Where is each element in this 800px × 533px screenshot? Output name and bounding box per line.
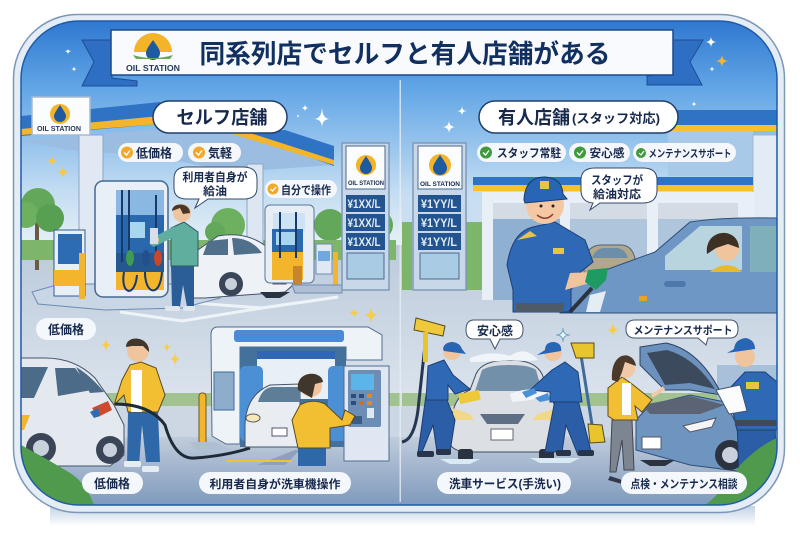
drop shadow <box>50 506 755 526</box>
sky <box>21 21 777 246</box>
price sign staffed: ¥1YY/L <box>421 237 457 249</box>
label: low price lower <box>82 472 143 494</box>
trees behind sign <box>402 222 482 290</box>
price sign staffed: OIL STATION <box>420 181 460 188</box>
panel: bottom right services <box>402 318 777 505</box>
wall strip <box>115 406 776 437</box>
speech bubble: self refuel: 給油 <box>203 184 227 198</box>
bush right <box>705 438 777 505</box>
panel: self store station <box>13 49 396 321</box>
chip: easy <box>188 143 241 162</box>
bubble: maintenance support <box>626 320 738 345</box>
bollard <box>190 393 232 450</box>
road <box>60 437 736 504</box>
customer woman <box>608 355 664 484</box>
column right <box>752 134 776 218</box>
panel: bottom left car and fuel <box>21 306 389 505</box>
speech bubble: self refuel <box>174 167 257 208</box>
man at wash console <box>292 374 355 466</box>
worker right <box>522 342 594 456</box>
mechanic car <box>636 343 777 472</box>
chip: maintenance support <box>633 143 736 162</box>
roof sign <box>32 97 90 135</box>
sparkles sky left <box>64 49 330 128</box>
column left <box>79 135 103 300</box>
platform <box>32 284 220 310</box>
price sign: OIL STATION <box>348 180 384 187</box>
price sign staffed: ¥1YY/L <box>421 199 457 211</box>
right sky overlay <box>402 213 482 244</box>
column middle <box>247 164 263 294</box>
speech bubble: staff refuels: 給油対応 <box>593 187 642 201</box>
canopy underside <box>21 130 333 172</box>
canopy underside right <box>668 131 753 176</box>
chip: staff on duty: スタッフ常駐 <box>497 146 561 160</box>
badge: self store <box>153 101 287 133</box>
soap puddles <box>440 458 580 464</box>
label: low price upper <box>36 318 96 340</box>
title text: 同系列店でセルフと有人店舗がある <box>200 39 610 69</box>
canopy top <box>21 102 160 136</box>
price sign: ¥1XX/L <box>348 237 380 249</box>
man with nozzle <box>114 338 165 472</box>
bubble: peace of mind <box>466 320 523 349</box>
badge: staffed store: (スタッフ対応) <box>572 111 660 126</box>
chip: low price <box>118 143 183 162</box>
chip: low price: 低価格 <box>136 146 172 160</box>
price sign staffed <box>413 143 466 290</box>
panel: staffed store <box>402 36 777 313</box>
bubble: peace of mind: 安心感 <box>477 323 513 338</box>
hedge: background left <box>106 393 401 406</box>
bubble: maintenance support: メンテナンスサポート <box>634 324 732 337</box>
trees left <box>13 188 396 270</box>
chip: maintenance support: メンテナンスサポート <box>648 148 732 160</box>
man at pump <box>150 204 198 311</box>
center divider <box>400 80 401 502</box>
chip: self operate: 自分で操作 <box>281 183 331 197</box>
badge: self store: セルフ店舗 <box>176 107 268 128</box>
mechanic staff <box>716 338 777 505</box>
pump small <box>265 205 342 293</box>
label: inspection <box>621 472 747 494</box>
title banner <box>82 30 703 86</box>
hedge: background right <box>402 393 717 406</box>
label: hand wash: 洗車サービス(手洗い) <box>449 476 561 491</box>
label: self car wash: 利用者自身が洗車機操作 <box>210 477 341 491</box>
car wash machine <box>211 327 389 465</box>
price sign: ¥1XX/L <box>348 199 380 211</box>
roof sign: OIL STATION <box>37 126 81 133</box>
forecourt lines <box>100 296 338 321</box>
sparkles right sky <box>442 36 717 134</box>
sparkle gold right <box>606 321 620 337</box>
label: low price lower: 低価格 <box>94 476 130 491</box>
label: hand wash <box>437 472 571 494</box>
canopy yellow right <box>668 125 777 131</box>
logo: OIL STATION <box>126 64 180 73</box>
ribbon left <box>82 40 137 86</box>
chip: peace of mind <box>569 143 630 162</box>
chip: peace of mind: 安心感 <box>590 146 625 160</box>
label: inspection: 点検・メンテナンス相談 <box>630 477 738 491</box>
ribbon right <box>647 40 703 85</box>
banner plate <box>111 30 673 75</box>
speech bubble: self refuel: 利用者自身が <box>182 170 248 184</box>
speech bubble: staff refuels <box>581 168 657 210</box>
sparkles yellow left <box>46 155 70 179</box>
price sign: ¥1XX/L <box>348 218 380 230</box>
garage building <box>473 177 754 300</box>
canopy yellow stripe left <box>21 116 160 135</box>
label: low price upper: 低価格 <box>48 322 84 337</box>
blue car with driver <box>560 218 777 313</box>
fuel nozzle and hose <box>90 401 250 458</box>
canopy band right <box>668 110 777 125</box>
price sign <box>342 143 389 290</box>
price sign staffed: ¥1YY/L <box>421 218 457 230</box>
mop upper <box>414 318 445 362</box>
small sign pump <box>54 230 85 299</box>
canopy right wing <box>252 130 334 166</box>
chip: staff on duty <box>477 143 566 162</box>
washed car <box>449 351 560 461</box>
sparkles mid right <box>556 328 570 342</box>
worker left <box>417 342 481 457</box>
chip: easy: 気軽 <box>208 146 232 160</box>
bush left <box>21 445 94 505</box>
pump big <box>95 181 168 297</box>
sparkle gold top right <box>715 54 729 68</box>
badge: staffed store: 有人店舗 <box>498 107 570 128</box>
speech bubble: staff refuels: スタッフが <box>591 173 643 187</box>
sparkles gold bottom left <box>100 306 379 367</box>
car white <box>190 235 293 298</box>
logo <box>126 33 180 73</box>
badge: staffed store <box>479 101 678 133</box>
label: self car wash <box>199 472 351 494</box>
hand wash hose <box>402 345 425 442</box>
chip: self operate <box>265 180 337 198</box>
staff refueling <box>507 177 608 312</box>
white car side <box>21 358 124 466</box>
ground: upper <box>21 245 777 410</box>
canopy yellow stripe right <box>232 133 334 165</box>
broom <box>571 343 605 443</box>
